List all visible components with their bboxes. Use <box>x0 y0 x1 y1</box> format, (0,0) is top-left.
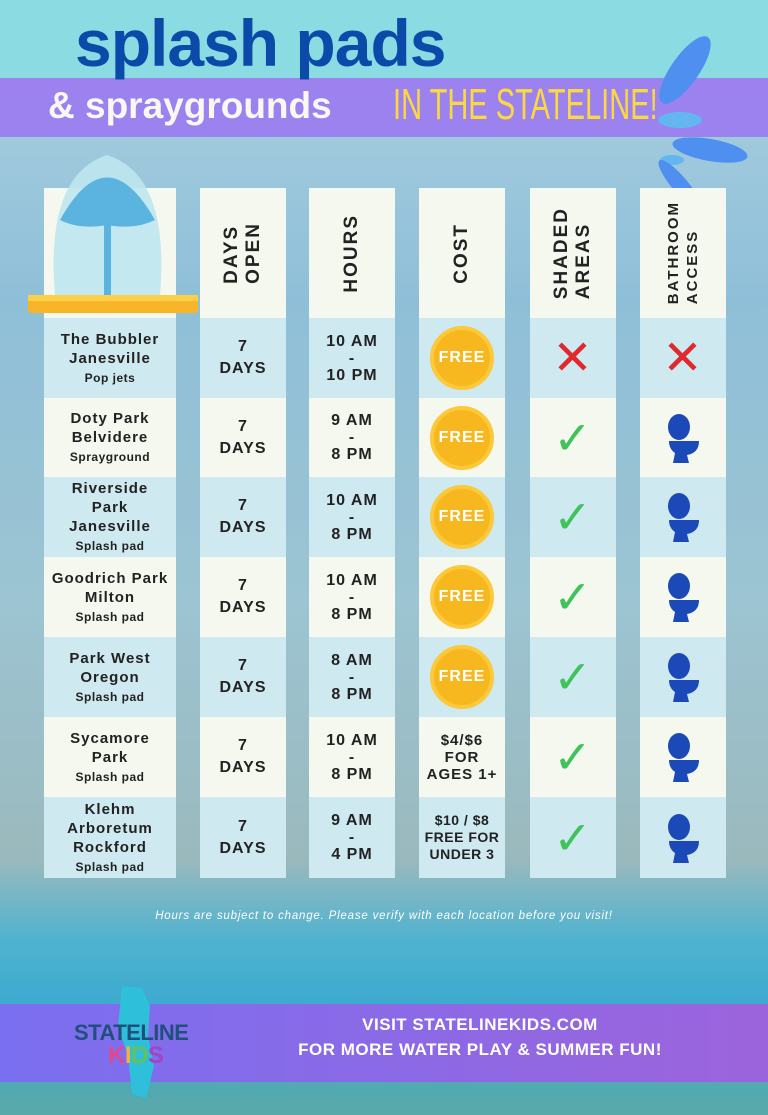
text: Splash pad <box>75 770 144 784</box>
text: FREE <box>439 428 485 446</box>
text: Sprayground <box>70 450 150 464</box>
text: 10 AM <box>326 732 378 748</box>
footer call to action <box>298 1015 662 1059</box>
text: SHADED <box>551 207 572 299</box>
text: AREAS <box>573 223 594 299</box>
text: 7 <box>238 737 248 754</box>
text: 8 PM <box>331 526 373 542</box>
row: Doty Park <box>44 398 726 477</box>
text: 8 PM <box>331 686 373 702</box>
text: ACCESS <box>684 230 701 305</box>
text: Park <box>92 499 128 516</box>
text: ✓ <box>553 651 593 703</box>
text: - <box>349 748 355 766</box>
text: - <box>349 508 355 526</box>
subtitle: in the stateline: IN THE STATELINE! <box>393 80 658 129</box>
text: DAYS <box>221 225 242 284</box>
text: ✕ <box>552 332 594 385</box>
row: Park West <box>44 637 726 717</box>
text: FREE FOR <box>425 829 499 845</box>
text: Splash pad <box>75 860 144 874</box>
logo: Stateline Kids: KIDS <box>108 1042 163 1069</box>
text: Pop jets <box>85 370 135 384</box>
text: ✓ <box>553 731 593 783</box>
logo: Stateline Kids <box>74 986 188 1098</box>
text: 10 AM <box>326 332 378 350</box>
text: ✓ <box>553 412 593 464</box>
title: splash pads: splash pads <box>75 6 445 80</box>
row: Riverside Park <box>44 477 726 557</box>
text: Oregon <box>80 668 140 686</box>
text: 8 PM <box>331 606 373 622</box>
disclaimer note: Hours are subject to change. Please verify with each location before you visit! <box>155 910 613 922</box>
text: Janesville <box>69 350 151 366</box>
purple title band <box>0 78 768 137</box>
text: $10 / $8 <box>435 812 489 828</box>
logo: Stateline Kids: STATELINE <box>74 1020 188 1045</box>
icon: fountain <box>28 155 198 313</box>
text: DAYS <box>220 679 266 696</box>
text: FOR <box>445 748 479 766</box>
text: Goodrich Park <box>52 570 168 586</box>
text: BATHROOM <box>665 201 682 305</box>
text: Rockford <box>73 838 147 856</box>
text: DAYS <box>220 360 266 377</box>
text: ✓ <box>553 491 593 543</box>
text: DAYS <box>220 759 266 776</box>
text: 8 PM <box>331 766 373 782</box>
row: Klehm Arboretum <box>44 797 726 878</box>
text: Park <box>92 748 128 766</box>
text: 7 <box>238 338 248 355</box>
text: Park West <box>69 650 151 666</box>
text: Janesville <box>69 518 151 535</box>
text: 9 AM <box>331 412 373 429</box>
text: Splash pad <box>75 690 144 704</box>
text: - <box>349 350 355 366</box>
text: 8 PM <box>331 446 373 463</box>
table header <box>44 188 726 318</box>
text: - <box>349 668 355 686</box>
text: Doty Park <box>70 410 150 427</box>
text: DAYS <box>220 440 266 456</box>
text: FREE <box>439 588 485 605</box>
text: DAYS <box>220 840 266 856</box>
text: ✕ <box>662 332 704 385</box>
text: 7 <box>238 818 248 834</box>
text: - <box>349 829 355 846</box>
text: HOURS <box>341 214 362 292</box>
text: 4 PM <box>331 846 373 863</box>
text: UNDER 3 <box>430 846 494 862</box>
text: 7 <box>238 657 248 674</box>
footer call to action: VISIT STATELINEKIDS.COM <box>362 1015 598 1034</box>
footer call to action: FOR MORE WATER PLAY & SUMMER FUN! <box>298 1040 662 1059</box>
text: - <box>349 588 355 606</box>
text: COST <box>451 223 472 283</box>
text: 10 PM <box>326 366 378 384</box>
text: Milton <box>85 588 135 606</box>
text: FREE <box>439 668 485 685</box>
text: - <box>349 429 355 446</box>
text: $4/$6 <box>441 732 483 748</box>
footer band <box>0 1004 768 1082</box>
text: Arboretum <box>67 820 153 836</box>
text: Belvidere <box>72 429 148 446</box>
text: FREE <box>439 349 485 366</box>
row: Sycamore Park <box>44 717 726 797</box>
text: DAYS <box>220 519 266 536</box>
text: Riverside <box>72 480 148 497</box>
text: DAYS <box>220 599 266 616</box>
text: ✓ <box>553 571 593 623</box>
text: 7 <box>238 418 248 434</box>
text: ✓ <box>553 812 593 864</box>
text: 8 AM <box>331 652 373 668</box>
text: Klehm <box>85 800 135 818</box>
text: The Bubbler <box>61 330 159 348</box>
text: FREE <box>439 508 485 525</box>
text: OPEN <box>243 222 264 284</box>
subtitle: & spraygrounds <box>48 85 332 126</box>
row: Goodrich Park <box>44 557 726 637</box>
text: 9 AM <box>331 812 373 829</box>
text: AGES 1+ <box>427 766 497 782</box>
text: Splash pad <box>75 539 144 553</box>
text: Splash pad <box>75 610 144 624</box>
text: 10 AM <box>326 492 378 508</box>
text: 10 AM <box>326 572 378 588</box>
icon: water splash <box>658 36 748 188</box>
text: 7 <box>238 497 248 514</box>
data rows <box>44 318 726 878</box>
text: 7 <box>238 577 248 594</box>
text: Sycamore <box>70 730 150 746</box>
row: The Bubbler <box>44 318 726 398</box>
